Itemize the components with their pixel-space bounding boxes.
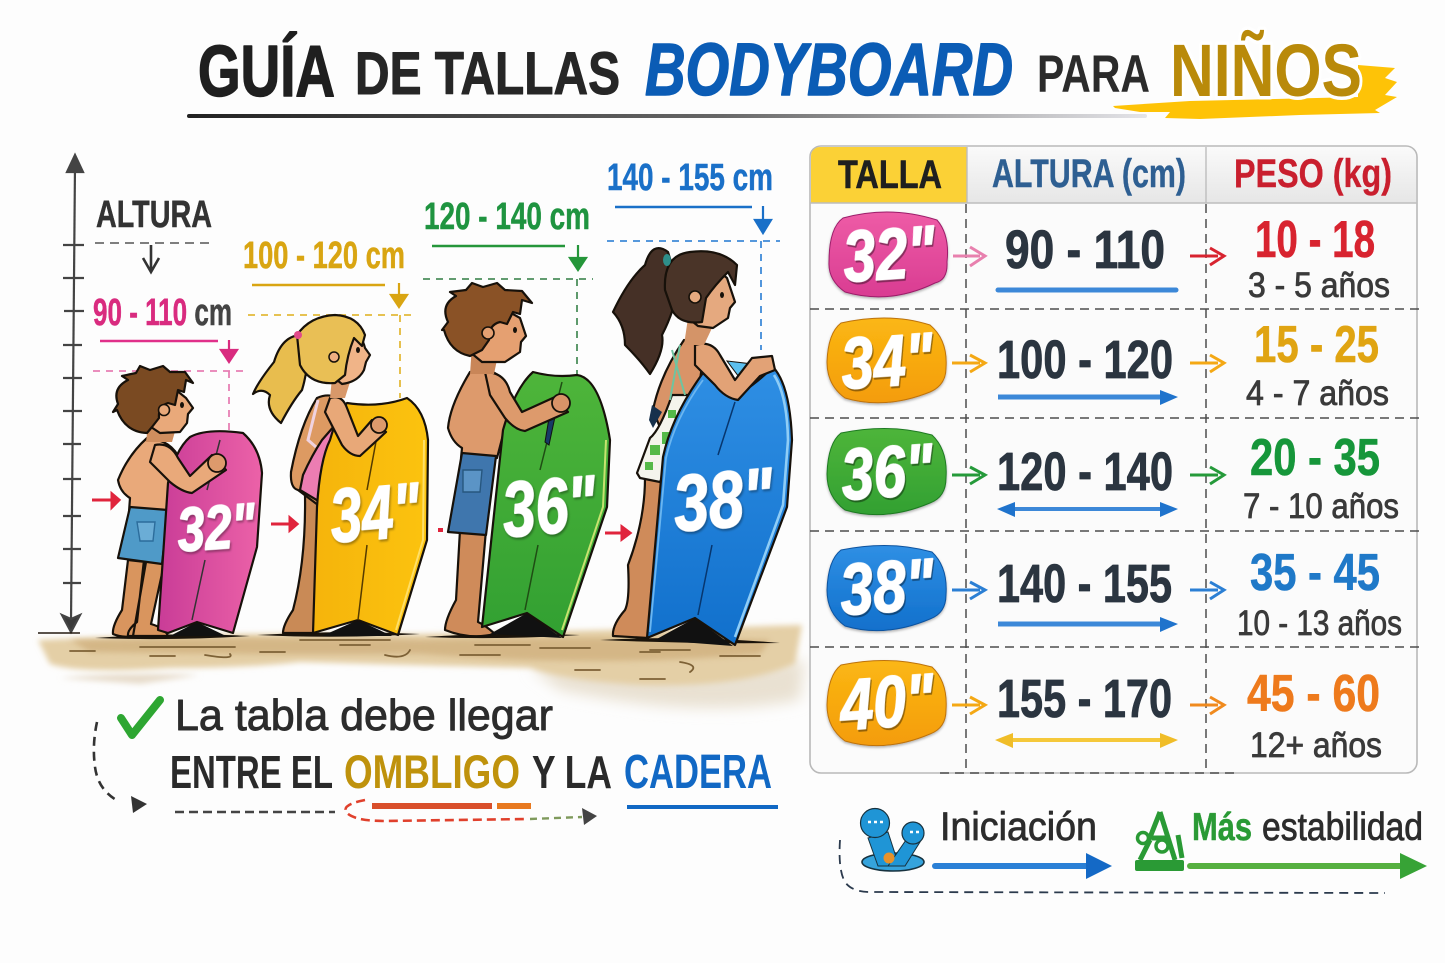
girl ponytail — [613, 248, 678, 374]
row 36 inch: 120 - 140 — [997, 442, 1173, 502]
notch shadow — [490, 613, 562, 638]
boy legs — [113, 560, 168, 637]
row 40 inch — [827, 660, 1382, 765]
label Más estabilidad — [1192, 806, 1423, 849]
girl legs — [613, 478, 662, 638]
girl arm — [695, 344, 775, 400]
ground shadows — [95, 632, 780, 643]
icon: stability boards — [1135, 812, 1184, 871]
row 38 inch: 35 - 45 — [1250, 544, 1380, 602]
row 36 inch: 20 - 35 — [1250, 429, 1380, 487]
row 40 inch: 155 - 170 — [997, 669, 1172, 729]
child 1 with 32 inch board — [113, 366, 262, 637]
icon: beginner boards — [860, 808, 924, 871]
altura label — [95, 194, 212, 272]
title — [187, 28, 1397, 119]
boy arm — [485, 372, 568, 431]
icon: check mark — [121, 700, 160, 735]
boy arm — [150, 445, 226, 493]
boy shorts — [118, 507, 168, 564]
advice line two: ENTRE EL — [170, 746, 333, 798]
pill 38 — [827, 545, 946, 631]
row 36 inch: 7 - 10 años — [1243, 487, 1399, 526]
boy legs — [445, 530, 495, 636]
notch shadow — [170, 622, 226, 636]
title words: BODYBOARD — [645, 28, 1013, 111]
board 32 — [158, 431, 262, 633]
height guide 120-140: 120 - 140 cm — [424, 196, 590, 238]
height guide 100-120: 100 - 120 cm — [243, 235, 405, 277]
board 34 — [313, 398, 428, 635]
row 34 inch: 15 - 25 — [1254, 316, 1379, 374]
advice line two: OMBLIGO — [344, 745, 520, 798]
row 34 inch: 34" — [838, 319, 937, 405]
row 32 inch: 32" — [840, 212, 939, 298]
girl torso — [291, 395, 345, 505]
child 3 with 36 inch board: 36" — [498, 458, 601, 554]
title underline — [187, 114, 1147, 118]
row 32 inch: 3 - 5 años — [1248, 266, 1390, 305]
girl dress — [637, 395, 692, 482]
child 1 with 32 inch board: 32" — [175, 491, 259, 566]
pill 40 — [827, 660, 946, 746]
boy head — [470, 345, 498, 374]
title words: NIÑOS — [1170, 29, 1362, 112]
row 40 inch: 40" — [836, 660, 937, 746]
title words: GUÍA — [198, 32, 335, 112]
red arrow 4 — [605, 527, 630, 539]
advice line one: La tabla debe llegar — [175, 691, 553, 740]
row 40 inch: 45 - 60 — [1247, 665, 1380, 723]
notch shadow — [322, 620, 392, 636]
row 36 inch: 36" — [839, 430, 937, 516]
brush stroke behind NIÑOS — [1113, 65, 1397, 119]
height guide 90-110: 90 - 110 cm — [93, 292, 232, 334]
girl ponytail — [253, 335, 308, 423]
row 38 inch — [827, 544, 1402, 643]
height guide 140-155 — [607, 157, 780, 350]
title words: DE TALLAS — [355, 40, 620, 107]
child 3 with 36 inch board — [442, 283, 610, 638]
header row — [810, 147, 1417, 203]
child 4 with 38 inch board — [613, 248, 792, 646]
child 2 with 34 inch board — [253, 315, 428, 636]
pill 32 — [829, 212, 948, 297]
label Más estabilidad: estabilidad — [1262, 806, 1423, 849]
boy head — [146, 425, 176, 442]
underlines and dashed arrows — [94, 722, 778, 825]
row 34 inch: 4 - 7 años — [1246, 374, 1389, 413]
girl head — [684, 318, 712, 345]
girl swimsuit — [300, 425, 335, 505]
header row: PESO (kg) — [1234, 152, 1392, 196]
label Iniciación: Iniciación — [940, 805, 1097, 849]
title words: PARA — [1037, 45, 1150, 104]
child 4 with 38 inch board: 38" — [670, 451, 778, 548]
girl legs — [283, 495, 322, 633]
pill 36 — [827, 428, 946, 515]
pill 34 — [827, 318, 946, 403]
row 38 inch: 38" — [837, 545, 937, 631]
advice line two — [170, 745, 772, 799]
sand ground — [38, 625, 805, 708]
row 36 inch — [827, 428, 1399, 526]
boy shorts — [448, 453, 496, 535]
row 34 inch — [827, 316, 1389, 413]
header row: TALLA — [838, 153, 942, 197]
girl arm — [325, 397, 386, 456]
height guide 90-110 — [93, 292, 243, 430]
fit advice callout — [94, 691, 778, 825]
arrow Más estabilidad — [1190, 853, 1427, 879]
board 38 — [647, 367, 792, 645]
red arrow 3 — [438, 528, 443, 532]
board top — [727, 361, 770, 385]
height guide 100-120 — [243, 235, 415, 398]
red arrow 2 — [271, 518, 297, 530]
advice line two: CADERA — [624, 746, 772, 799]
boy torso — [118, 438, 180, 512]
legend progression — [840, 805, 1427, 893]
size table — [810, 146, 1425, 773]
girl head — [330, 378, 350, 398]
height guide 140-155: 140 - 155 cm — [607, 157, 773, 199]
row 32 inch: 90 - 110 — [1005, 220, 1165, 280]
row 32 inch: 10 - 18 — [1255, 211, 1375, 269]
row 38 inch: 10 - 13 años — [1237, 604, 1402, 643]
row 32 inch — [829, 211, 1390, 305]
arrow Iniciación — [935, 853, 1112, 879]
notch shadow — [655, 618, 733, 646]
row 40 inch: 12+ años — [1250, 726, 1382, 765]
row 34 inch: 100 - 120 — [997, 330, 1173, 390]
title words — [198, 28, 1362, 112]
row 38 inch: 140 - 155 — [997, 554, 1172, 614]
boy torso — [448, 370, 512, 458]
red arrow 1 — [92, 494, 119, 507]
height guide 120-140 — [423, 196, 593, 375]
girl back — [653, 340, 705, 440]
table background — [810, 146, 1417, 773]
board 36 — [482, 372, 610, 637]
height axis — [62, 155, 84, 632]
child 2 with 34 inch board: 34" — [327, 467, 424, 560]
advice line two: Y LA — [532, 746, 612, 798]
header row: ALTURA (cm) — [992, 152, 1186, 196]
label Más estabilidad: Más — [1192, 806, 1252, 849]
altura label: ALTURA — [96, 194, 212, 236]
